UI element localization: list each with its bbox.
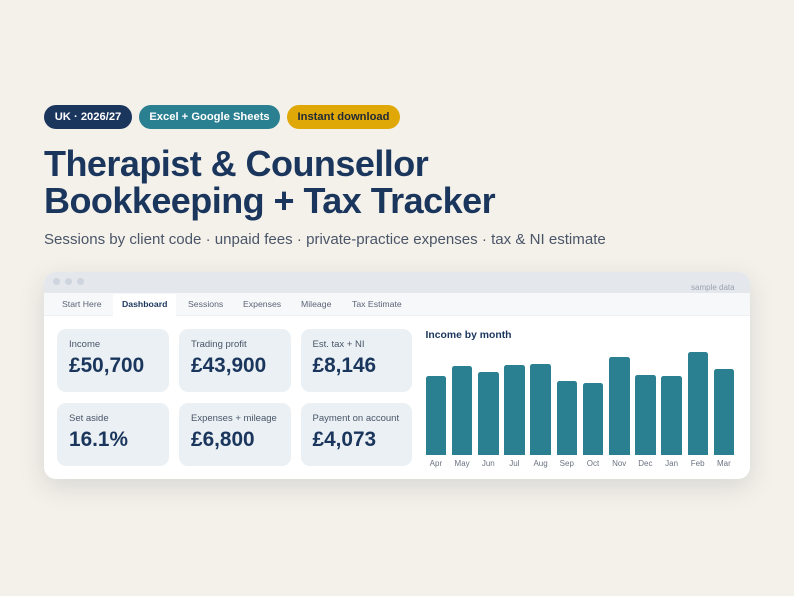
card: Trading profit: Trading profit: [191, 339, 247, 350]
tab: Sessions: Sessions: [188, 299, 223, 309]
card: Income: [57, 329, 168, 392]
month labels: Jun: [482, 459, 495, 468]
badge: UK 2026/27: UK · 2026/27: [55, 111, 121, 123]
bar Feb: [688, 352, 708, 455]
month labels: Mar: [717, 459, 731, 468]
tab: Mileage: Mileage: [301, 299, 331, 309]
month labels: [430, 459, 731, 468]
month labels: Apr: [430, 459, 442, 468]
card: Set aside: Set aside: [69, 413, 109, 424]
card: Trading profit: £43,900: [191, 354, 266, 376]
month labels: May: [455, 459, 470, 468]
bar Jun: [478, 372, 499, 455]
bar chart: income by month: [426, 352, 734, 468]
card: Est. tax + NI: £8,146: [312, 354, 376, 376]
bar Sep: [557, 381, 577, 455]
tab: Dashboard: Dashboard: [122, 299, 167, 309]
title: Bookkeeping + Tax Tracker: [44, 180, 495, 220]
chart heading: Income by month: [426, 330, 512, 340]
active tab background: [113, 294, 176, 316]
tab: Expenses: Expenses: [243, 299, 281, 309]
window title bar: [44, 272, 750, 293]
window control dots: [53, 278, 84, 285]
badge: Instant download: [287, 105, 400, 129]
badge: Excel + Google Sheets: Excel + Google Sheets: [149, 111, 270, 123]
card: Income: £50,700: [69, 354, 144, 376]
badge: UK 2026/27: [44, 105, 132, 129]
card: Trading profit: [179, 329, 290, 392]
month labels: Nov: [612, 459, 626, 468]
tab: Start Here: Start Here: [62, 299, 102, 309]
title: [44, 143, 496, 220]
card: Expenses + mileage: Expenses + mileage: [191, 413, 277, 424]
bar Apr: [426, 376, 446, 455]
month labels: Aug: [533, 459, 548, 468]
card: Expenses + mileage: [179, 403, 290, 466]
month labels: Jul: [509, 459, 520, 468]
bar Oct: [583, 383, 603, 455]
subtitle: Sessions by client code · unpaid fees · private-practice expenses · tax & NI estimate: [44, 231, 606, 248]
month labels: Oct: [587, 459, 599, 468]
badge: Instant download: Instant download: [298, 111, 389, 123]
card: Set aside: 16.1%: [69, 428, 128, 450]
card: Set aside: [57, 403, 168, 466]
card: Payment on account: £4,073: [312, 428, 376, 450]
tab bar: [44, 293, 750, 316]
month labels: Dec: [638, 459, 652, 468]
card: Payment on account: Payment on account: [312, 413, 399, 424]
month labels: Feb: [691, 459, 705, 468]
sample data label: sample data: [691, 282, 735, 292]
title: Therapist & Counsellor: [44, 143, 428, 184]
card: Expenses + mileage: £6,800: [191, 428, 255, 450]
bar May: [452, 366, 472, 455]
month labels: Jan: [665, 459, 678, 468]
tab: Tax Estimate: Tax Estimate: [352, 299, 402, 309]
panel: dashboard window: [44, 272, 750, 479]
bar Dec: [635, 375, 656, 455]
bar Mar: [714, 369, 734, 455]
card: Est. tax + NI: Est. tax + NI: [312, 339, 365, 350]
card: Est. tax + NI: [300, 329, 412, 392]
card: Income: Income: [69, 339, 100, 350]
card: Payment on account: [300, 403, 412, 466]
bar Jul: [504, 365, 525, 455]
bar Nov: [609, 357, 630, 455]
month labels: Sep: [560, 459, 574, 468]
badge: Excel + Google Sheets: [139, 105, 280, 129]
bar Aug: [530, 364, 551, 455]
bar Jan: [661, 376, 682, 455]
